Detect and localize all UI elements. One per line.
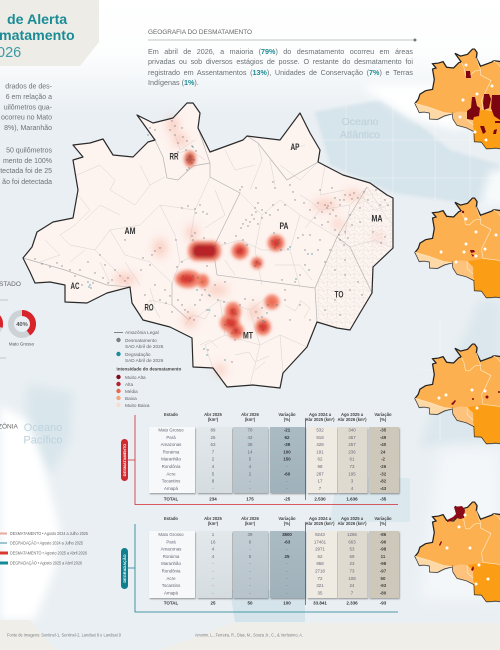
column backgrounds	[149, 531, 399, 598]
rows: 24	[350, 583, 355, 588]
rows: 9243	[315, 532, 325, 537]
rows: 62	[285, 435, 290, 440]
rows: 663	[348, 539, 356, 544]
rows: 340	[348, 428, 356, 432]
deforestation points	[35, 121, 388, 362]
rows: 100	[283, 449, 291, 454]
rows: -	[286, 486, 288, 491]
rows: -	[249, 583, 251, 588]
border	[23, 103, 393, 388]
header: Abr 2026 (km²)	[337, 521, 367, 526]
intro text: mento de 100%	[3, 158, 52, 165]
header: (%)	[380, 521, 387, 526]
rows: -32	[380, 471, 387, 476]
mini map 2: reference panel	[415, 198, 500, 298]
state borders	[23, 128, 372, 322]
dense municipalities MA TO	[315, 187, 393, 330]
title panel	[0, 0, 99, 66]
rows: 4	[212, 554, 215, 559]
title panel: de Alerta	[7, 12, 67, 28]
rows: 16	[211, 539, 216, 544]
heading: estado with donut	[0, 281, 35, 358]
municipal boundaries	[40, 135, 393, 385]
rows	[158, 428, 387, 491]
rows: -	[249, 486, 251, 491]
rows: 2718	[315, 568, 325, 574]
rows: 24	[381, 449, 386, 454]
rows: Pará	[166, 435, 176, 440]
rows: 918	[316, 435, 324, 440]
ocean labels: Pacífico	[23, 434, 63, 446]
intro text: tectada foi de 25	[0, 168, 52, 175]
total row: 100	[283, 600, 291, 606]
state labels: AP	[290, 142, 300, 152]
state labels: TO	[334, 290, 344, 300]
header: Ago 2024 a	[309, 412, 332, 417]
rows: -	[286, 547, 288, 552]
map legend	[114, 330, 182, 408]
total row: 50	[247, 600, 253, 606]
bracket	[127, 415, 398, 504]
rows: Rondônia	[162, 464, 181, 469]
map legend: Muito Baixa	[125, 403, 150, 408]
header: (km²)	[245, 417, 256, 422]
rows: 14	[248, 449, 253, 454]
geography text block: privadas ou sob diversos estágios de posse. O restante do desmatamento foi	[148, 57, 413, 66]
rows: 50	[381, 576, 386, 581]
state labels: MT	[243, 330, 253, 340]
ocean labels	[23, 116, 380, 446]
rows: -	[249, 547, 251, 552]
heading: estado with donut: 40%	[16, 322, 28, 328]
total row: TOTAL	[164, 496, 179, 502]
map legend: Baixa	[125, 396, 137, 401]
header: Variação	[278, 412, 296, 417]
rows: 7	[319, 486, 322, 491]
mini map 1: reference panel	[415, 49, 500, 149]
rows: -	[212, 568, 214, 574]
rows: 17	[318, 479, 323, 484]
rows: -	[249, 590, 251, 595]
state labels: RO	[144, 302, 154, 312]
state labels: RR	[170, 152, 179, 162]
rows: -93	[380, 583, 387, 588]
intro text: drados de des-	[5, 84, 53, 90]
geography text block: Indígenas (1%).	[148, 78, 199, 87]
column backgrounds	[149, 427, 399, 493]
rows: Mato Grosso	[158, 532, 184, 537]
rows: 5	[249, 457, 252, 462]
rows: 195	[348, 471, 356, 476]
total row: 175	[246, 496, 254, 502]
rows: 98	[318, 464, 323, 469]
pill label: DESMATAMENTO	[122, 444, 127, 476]
heading: estado with donut: Mato Grosso	[9, 342, 35, 346]
header	[164, 516, 392, 526]
rows: -	[212, 590, 214, 595]
rows: 42	[248, 435, 253, 440]
donut: Mato Grosso	[11, 313, 33, 335]
rows: Acre	[166, 576, 176, 581]
bracket	[127, 524, 398, 612]
rows: 2971	[315, 547, 325, 552]
deforestation heat: low	[114, 116, 382, 376]
header: Variação	[278, 516, 296, 521]
footer: Amorim, L., Ferreira, R., Dias, M., Souza Jr., C., & Veríssimo, A.	[195, 632, 303, 638]
rows: -	[212, 561, 214, 566]
rows: 191	[316, 449, 324, 454]
rows: 63	[211, 442, 216, 447]
rows: 3	[351, 479, 354, 484]
main map	[23, 103, 393, 388]
rows: Roraima	[163, 449, 180, 454]
rows: -96	[380, 539, 387, 544]
header: Abr 2025 (km²)	[305, 521, 335, 526]
header: (km²)	[208, 417, 219, 422]
rows: 61	[350, 457, 355, 462]
rows: 236	[348, 449, 356, 454]
rows: 2	[249, 471, 252, 476]
time series legend	[0, 531, 89, 565]
rows: -39	[284, 442, 291, 447]
rows: -	[249, 561, 251, 566]
rows: Amazonas	[161, 442, 182, 447]
rows: Rondônia	[162, 568, 181, 574]
total row: 234	[209, 496, 217, 502]
map legend: Intensidade do desmatamento	[116, 366, 182, 372]
header: Variação	[374, 412, 392, 417]
rows: 11	[381, 554, 386, 559]
rows: 287	[316, 471, 324, 476]
table: desmatamento	[121, 412, 399, 504]
rows: -63	[284, 539, 291, 544]
rows: 257	[348, 442, 356, 447]
rows: Tocantins	[162, 479, 181, 484]
rows: -	[286, 576, 288, 581]
header: Abr 2025	[204, 516, 223, 521]
rows: -21	[284, 428, 291, 432]
total row: TOTAL	[164, 600, 179, 606]
mini map 3: reference panel	[415, 344, 500, 444]
footer: Fonte de Imagens: Sentinel-1, Sentinel-2, Landsat 8 e Landsat 9	[7, 632, 122, 638]
rows: -2	[381, 457, 386, 462]
intro text	[0, 84, 53, 186]
map legend: SAD Abril de 2026	[125, 358, 164, 363]
rows: -40	[380, 442, 387, 447]
ocean labels: Oceano	[24, 422, 62, 434]
header: Ago 2025 a	[341, 516, 364, 521]
rows: 62	[318, 457, 323, 462]
total row: 33.841	[313, 600, 327, 606]
rows: 17461	[314, 539, 327, 544]
rows: 25	[285, 554, 290, 559]
title panel: matamento	[0, 28, 75, 44]
pill label: DEGRADAÇÃO	[122, 554, 127, 583]
header: Ago 2024 a	[309, 516, 332, 521]
map legend: Média	[125, 389, 138, 394]
intro text: uilômetros qua-	[4, 104, 53, 112]
header: Abr 2026 (km²)	[337, 417, 367, 422]
header: Ago 2025 a	[341, 412, 364, 417]
time series legend: DEGRADAÇÃO • Agosto 2024 a Julho 2025	[10, 541, 84, 546]
map outline fill	[23, 103, 393, 388]
rows: 73	[350, 464, 355, 469]
rows: 4	[249, 464, 252, 469]
time series legend: DEGRADAÇÃO • Agosto 2025 a Abril 2026	[10, 560, 83, 565]
intro text: ão foi detectada	[2, 179, 52, 186]
header	[164, 412, 392, 422]
section heading: geografia: GEOGRAFIA DO DESMATAMENTO	[148, 29, 252, 36]
total row: -25	[284, 496, 291, 502]
rows: Amapá	[164, 486, 179, 491]
header: Abr 2025	[204, 412, 223, 417]
state labels: MA	[372, 214, 383, 224]
state labels: AC	[70, 281, 80, 291]
map legend: Muito Alta	[125, 375, 146, 380]
total row: 1.636	[346, 496, 358, 502]
rows: 39	[248, 532, 253, 537]
rows: -	[249, 479, 251, 484]
ocean labels: Oceano	[342, 116, 379, 128]
rows: 69	[350, 554, 355, 559]
rows: 5	[212, 471, 215, 476]
rows: 62	[318, 554, 323, 559]
rows: -82	[380, 479, 387, 484]
rows: 321	[316, 583, 324, 588]
rows: Amazonas	[161, 547, 182, 552]
rows: -	[286, 583, 288, 588]
rows: 89	[211, 428, 216, 432]
rows: 26	[211, 435, 216, 440]
header: Abr 2026	[241, 412, 260, 417]
rows: 4	[212, 547, 215, 552]
rows: -	[286, 479, 288, 484]
footer	[7, 632, 303, 638]
rows: 72	[318, 576, 323, 581]
rows: -	[286, 590, 288, 595]
intro text: 50 quilômetros	[6, 148, 52, 154]
rows: 38	[248, 442, 253, 447]
time series legend: DESMATAMENTO • Agosto 2024 a Julho 2025	[10, 531, 89, 536]
pill label	[121, 548, 128, 589]
rows: -	[286, 464, 288, 469]
rows: Amapá	[164, 590, 179, 595]
total row: -93	[380, 600, 387, 606]
pill label	[121, 439, 128, 481]
rows: Tocantins	[162, 583, 181, 588]
rows: -	[249, 576, 251, 581]
header: Estado	[164, 516, 178, 521]
rows: -	[249, 568, 251, 574]
rows: -	[286, 568, 288, 574]
rows: Maranhão	[161, 561, 181, 566]
map legend: SAD Abril de 2026	[125, 344, 164, 349]
rows: 532	[316, 428, 324, 432]
rows: 8	[212, 479, 215, 484]
rows: -35	[380, 428, 387, 432]
rows: 108	[348, 576, 356, 581]
map legend: Amazônia Legal	[125, 330, 159, 335]
total row: 25	[210, 600, 216, 606]
rows: 7	[212, 449, 215, 454]
intro text: 6 em relação a	[6, 94, 52, 101]
header: (%)	[284, 417, 291, 422]
geography text block	[148, 47, 413, 87]
total row: 2.336	[346, 600, 358, 606]
total row: 2.530	[314, 496, 326, 502]
rows: 5	[249, 554, 252, 559]
rows: 3800	[282, 532, 292, 537]
intro text: 8%), Maranhão	[4, 125, 52, 132]
total row: -35	[380, 496, 387, 502]
rows: -	[212, 583, 214, 588]
rows: 1266	[347, 532, 357, 537]
map legend: Desmatamento	[125, 338, 157, 343]
rows: 4	[351, 486, 354, 491]
rows	[158, 532, 387, 595]
rows: 6	[249, 539, 252, 544]
rows: 70	[248, 428, 253, 432]
rows: -49	[380, 435, 387, 440]
rows: -98	[380, 561, 387, 566]
rows: 7	[351, 590, 354, 595]
rows: -43	[380, 486, 387, 491]
geography text block: Em abril de 2026, a maioria (79%) do desmatamento ocorreu em áreas	[148, 47, 413, 56]
header: (km²)	[245, 521, 256, 526]
map legend: Alta	[125, 382, 133, 387]
header: (%)	[284, 521, 291, 526]
geography text block: registrado em Assentamentos (13%), Unidades de Conservação (7%) e Terras	[148, 68, 413, 77]
rows: 150	[283, 457, 291, 462]
rows: Maranhão	[161, 457, 181, 462]
header: (km²)	[208, 521, 219, 526]
map legend: Degradação	[125, 352, 151, 357]
header: Estado	[164, 412, 178, 417]
rows: Pará	[166, 539, 176, 544]
rows: 958	[316, 561, 324, 566]
rows: 4	[212, 464, 215, 469]
header: (%)	[380, 417, 387, 422]
rows: -98	[380, 547, 387, 552]
rows: 23	[350, 561, 355, 566]
rows: 1	[212, 532, 215, 537]
state labels	[70, 142, 383, 340]
rows: 467	[348, 435, 356, 440]
ocean labels: Atlântico	[340, 129, 380, 141]
intro text: ocorreu no Mato	[1, 114, 52, 122]
rows: 53	[350, 547, 355, 552]
header: Abr 2025 (km²)	[305, 417, 335, 422]
rows: 35	[318, 590, 323, 595]
rows: -26	[380, 464, 387, 469]
rows: -86	[380, 532, 387, 537]
state labels: PA	[280, 221, 289, 231]
rows: -97	[380, 568, 387, 574]
header: Abr 2026	[241, 516, 260, 521]
header: Variação	[374, 516, 392, 521]
rows: 428	[316, 442, 324, 447]
time series legend: DESMATAMENTO • Agosto 2025 a Abril 2026	[10, 550, 88, 556]
mini map 4: reference panel	[415, 502, 500, 602]
rows: -	[286, 561, 288, 566]
rows: 73	[350, 568, 355, 574]
rows: -80	[380, 590, 387, 595]
degradation points	[88, 147, 312, 360]
rows: -	[212, 486, 214, 491]
rows: -60	[284, 471, 291, 476]
section heading: geografia	[148, 29, 416, 42]
deforestation heat: high	[175, 151, 284, 339]
rows: 2	[212, 457, 215, 462]
rows: Mato Grosso	[158, 428, 184, 432]
rows: Roraima	[163, 554, 180, 559]
rows: Acre	[166, 471, 176, 476]
rows: -	[212, 576, 214, 581]
state labels: AM	[124, 226, 136, 236]
table: degradação	[121, 516, 399, 612]
